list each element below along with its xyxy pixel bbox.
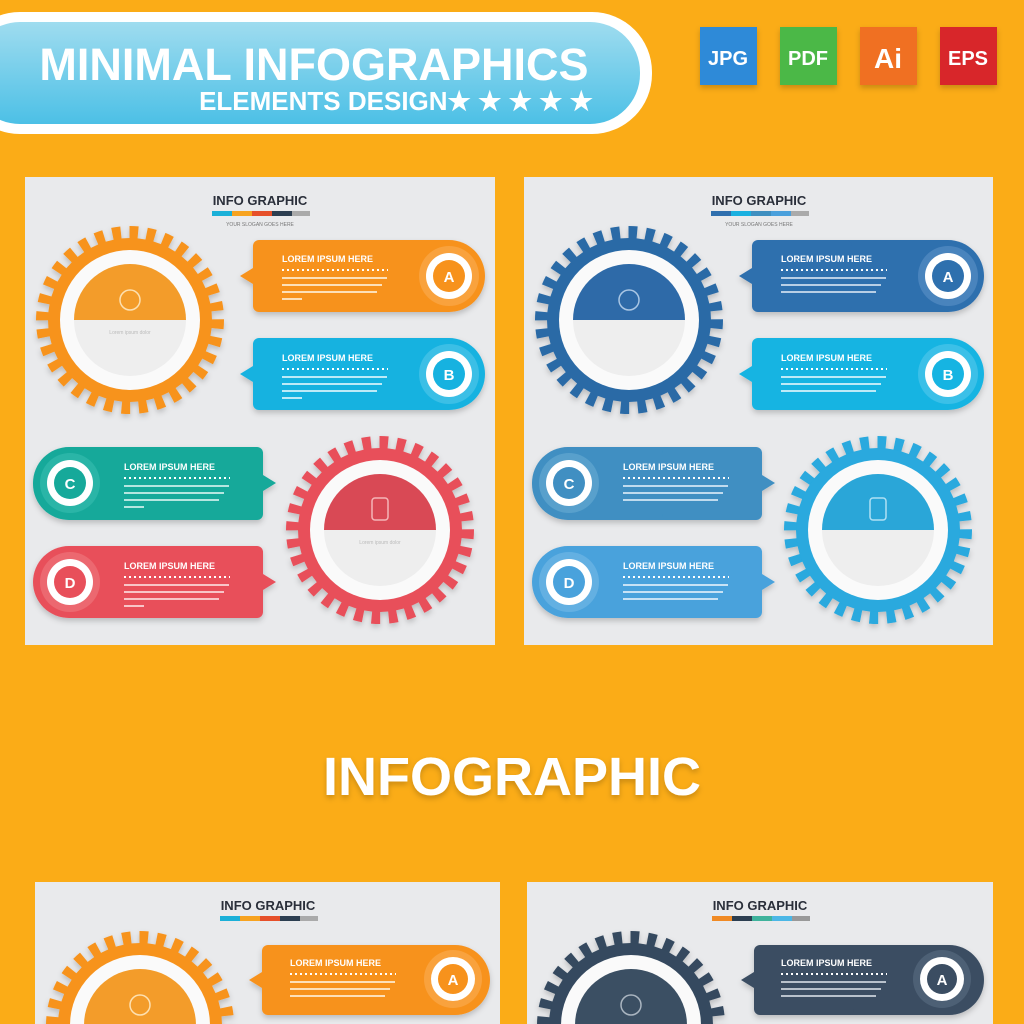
box C: LOREM IPSUM HERE xyxy=(124,462,215,472)
panel title: YOUR SLOGAN GOES HERE xyxy=(725,222,794,228)
header banner xyxy=(0,12,652,134)
central heading: INFOGRAPHIC xyxy=(323,747,701,807)
bottom gear navy xyxy=(545,939,717,1024)
panel: blue infographic xyxy=(524,177,993,645)
box A xyxy=(240,240,485,312)
box C: C xyxy=(65,476,76,493)
panel title: INFO GRAPHIC xyxy=(213,193,308,208)
bottom box A navy xyxy=(741,945,984,1015)
box B blue: LOREM IPSUM HERE xyxy=(781,353,872,363)
bottom box A orange xyxy=(249,945,490,1015)
bottom panel title: INFO GRAPHIC xyxy=(221,898,316,913)
bottom box A orange: LOREM IPSUM HERE xyxy=(290,958,381,968)
gear: dark blue xyxy=(543,234,715,406)
panel: orange/red infographic xyxy=(25,177,495,645)
format badges xyxy=(700,27,997,85)
format badges: PDF xyxy=(788,48,828,70)
box A blue: A xyxy=(943,269,954,286)
box A: A xyxy=(444,269,455,286)
panel: bottom navy preview xyxy=(527,882,993,1024)
bottom box A navy: LOREM IPSUM HERE xyxy=(781,958,872,968)
box A blue xyxy=(739,240,984,312)
format badges: EPS xyxy=(948,48,988,70)
box C blue xyxy=(532,447,775,520)
panel title xyxy=(711,193,809,228)
box B: B xyxy=(444,367,455,384)
box C blue: C xyxy=(564,476,575,493)
format badges: JPG xyxy=(708,48,748,70)
box D: D xyxy=(65,575,76,592)
box B xyxy=(240,338,485,410)
box D: LOREM IPSUM HERE xyxy=(124,561,215,571)
box C xyxy=(33,447,276,520)
panel title: INFO GRAPHIC xyxy=(712,193,807,208)
box D xyxy=(33,546,276,618)
bottom panel title navy xyxy=(712,898,810,921)
format badges: Ai xyxy=(874,43,902,74)
box D blue: LOREM IPSUM HERE xyxy=(623,561,714,571)
box C blue: LOREM IPSUM HERE xyxy=(623,462,714,472)
bottom box A navy: A xyxy=(937,972,948,989)
gear: red: Lorem ipsum dolor xyxy=(359,540,401,546)
bottom box A orange: A xyxy=(448,972,459,989)
box B: LOREM IPSUM HERE xyxy=(282,353,373,363)
panel title: YOUR SLOGAN GOES HERE xyxy=(226,222,295,228)
gear: red xyxy=(294,444,466,616)
box D blue xyxy=(532,546,775,618)
box D blue: D xyxy=(564,575,575,592)
box A: LOREM IPSUM HERE xyxy=(282,254,373,264)
header banner: ELEMENTS DESIGN★ ★ ★ ★ ★ xyxy=(199,86,594,116)
box B blue xyxy=(739,338,984,410)
bottom panel title navy: INFO GRAPHIC xyxy=(713,898,808,913)
gear: orange xyxy=(44,234,216,406)
panel: bottom orange preview xyxy=(35,882,500,1024)
gear: light blue xyxy=(792,444,964,616)
gear: orange: Lorem ipsum dolor xyxy=(109,330,151,336)
header banner: MINIMAL INFOGRAPHICS xyxy=(39,39,589,90)
box B blue: B xyxy=(943,367,954,384)
panel title xyxy=(212,193,310,228)
box A blue: LOREM IPSUM HERE xyxy=(781,254,872,264)
bottom panel title xyxy=(220,898,318,921)
bottom gear orange xyxy=(54,939,226,1024)
